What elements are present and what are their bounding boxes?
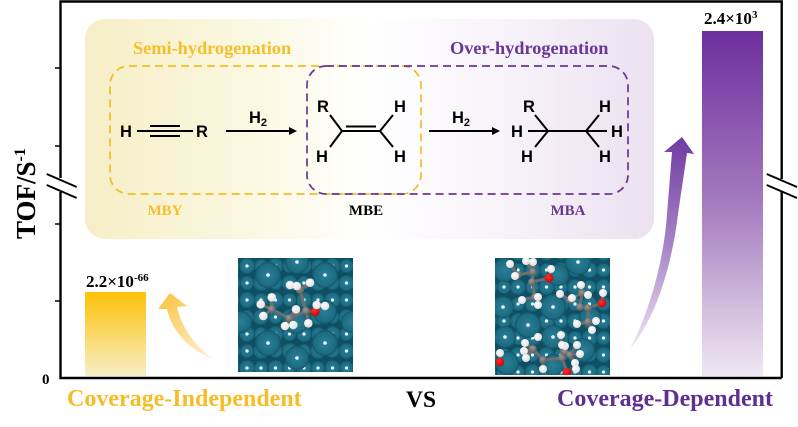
molecules: adsorbed MBA cluster [496,257,607,376]
arrow: yellow curved [158,293,213,359]
label: MBY: MBY [148,203,183,219]
bar value: 2.2×10^-66: -66 [134,272,149,284]
molecule: MBE: H [316,148,328,166]
axis zero label: 0 [42,372,50,388]
y axis title: TOF/S [11,161,41,239]
molecule: MBA: H [599,98,611,116]
molecule: MBE [316,98,406,166]
panel: reaction pathway background [85,19,654,239]
molecule: MBE: H [394,98,406,116]
molecule: MBY: H [120,123,132,141]
heading: semi-hydrogenation: Semi-hydrogenation [133,38,291,58]
surface model: single adsorbate [238,258,353,372]
molecule: MBE: R [317,98,329,116]
category label: coverage-dependent: Coverage-Dependent [557,386,773,412]
molecule: MBA [511,98,623,166]
bar: coverage-independent [85,292,146,376]
bar value: 2.4×10^3: 3 [752,9,758,21]
category label: coverage-independent: Coverage-Independent [67,386,302,412]
bar value: 2.4×10^3: 2.4×10 [704,9,752,28]
arrow: purple curved [630,137,694,349]
molecule: MBA: H [511,123,523,141]
y axis title: -1 [12,148,29,161]
molecule: MBA: R [523,98,535,116]
arrow: second hydrogenation: 2 [464,117,470,129]
arrow: first hydrogenation [226,109,297,135]
heading: over-hydrogenation: Over-hydrogenation [450,38,608,58]
arrow: second hydrogenation [429,109,500,135]
dashed box: semi-hydrogenation [110,66,421,194]
label: MBE: MBE [349,203,383,219]
molecule: MBA: H [599,148,611,166]
VS label: VS [406,387,436,413]
label: MBA: MBA [550,203,586,219]
arrow: first hydrogenation: H [249,109,261,127]
arrow: second hydrogenation: H [452,109,464,127]
molecule: MBY: R [196,123,208,141]
molecule: MBY [120,123,208,141]
bar value: 2.2×10^-66: 2.2×10 [86,272,134,291]
molecule: MBA: H [611,123,623,141]
dashed box: over-hydrogenation [307,66,628,194]
bar: coverage-dependent [702,31,763,376]
molecule: adsorbed MBA single [256,278,329,330]
surface model: multiple adsorbates [495,258,610,375]
arrow: first hydrogenation: 2 [261,117,267,129]
molecule: MBE: H [394,148,406,166]
molecule: MBA: H [521,148,533,166]
